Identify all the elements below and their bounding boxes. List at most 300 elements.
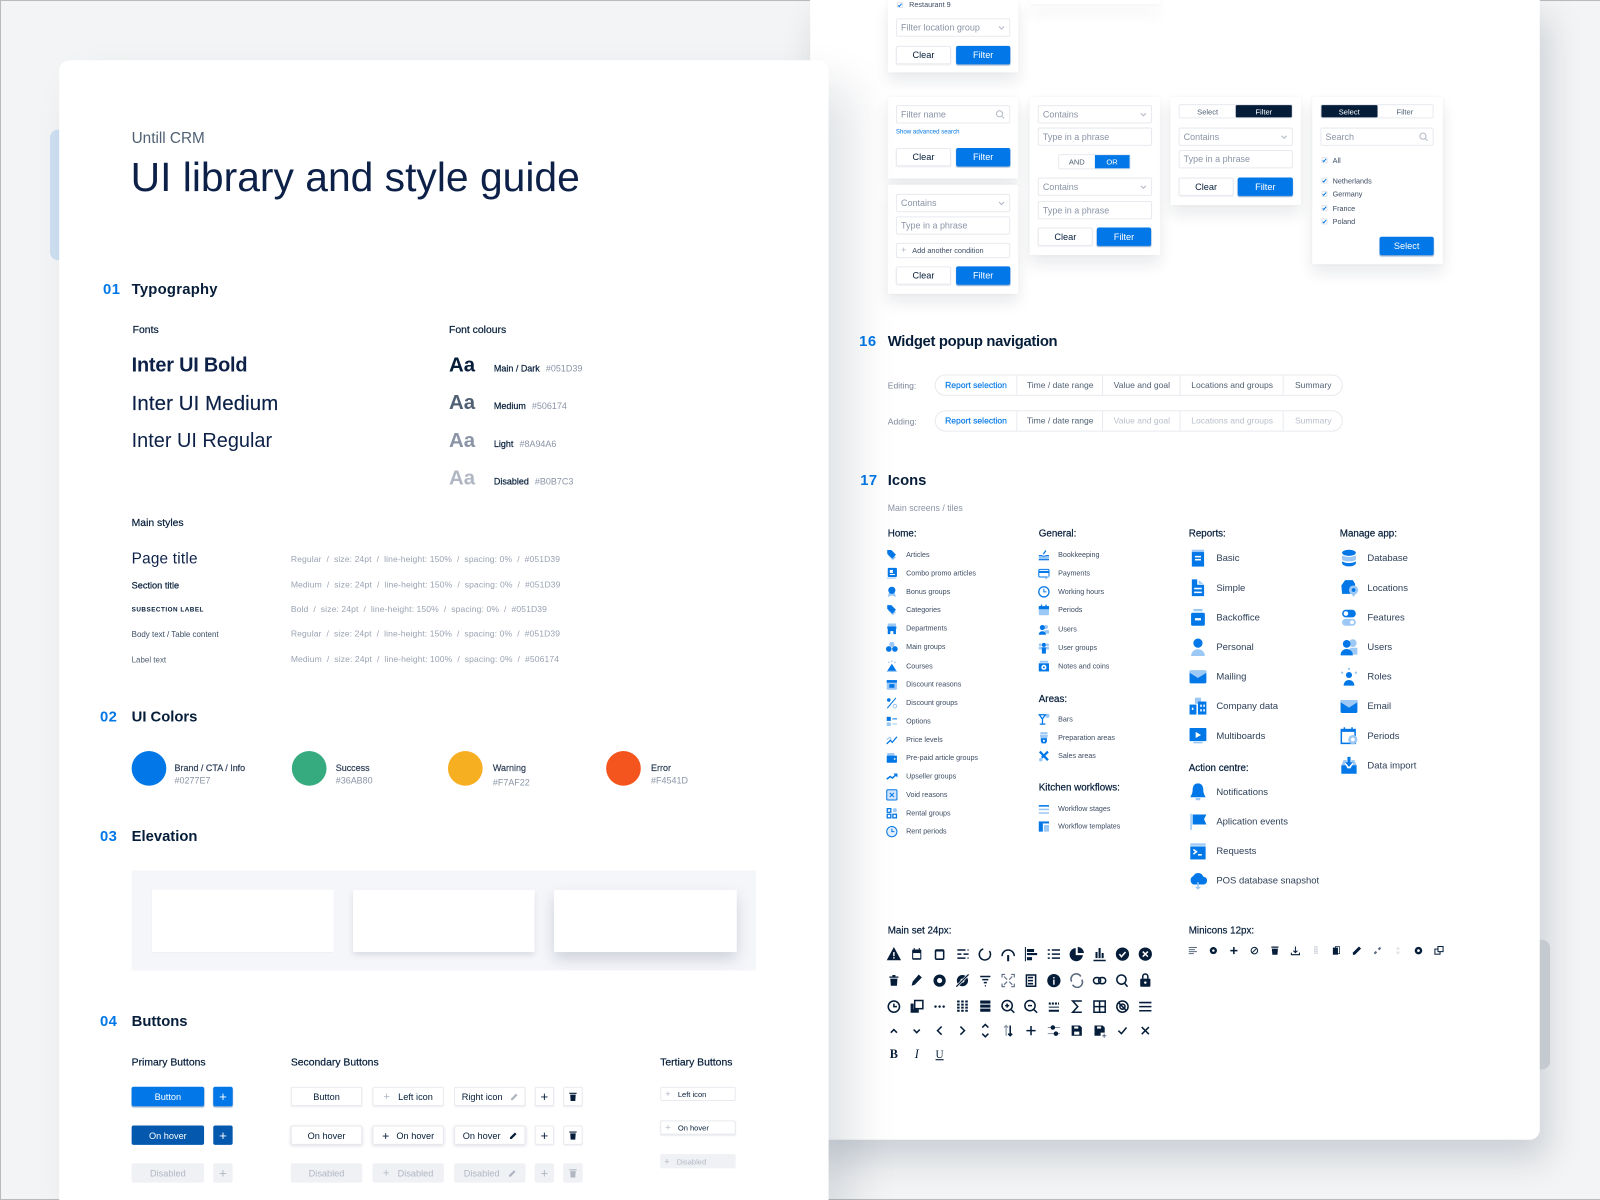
icon row: email: Email: [1367, 701, 1391, 711]
heading: 02 UI colors: [100, 709, 197, 727]
button: clear: [896, 266, 951, 285]
toggle: select filter: Select: [1197, 107, 1218, 116]
navigation bar: editing: Summary: [1295, 380, 1332, 390]
swatch hex: error: #F4541D: [651, 775, 688, 785]
icon row: main groups: [886, 642, 946, 652]
checkbox: france: [1321, 205, 1328, 211]
icon row: working hours: Working hours: [1058, 588, 1104, 595]
button: add another condition: +: [901, 245, 906, 255]
link: show advanced search: Show advanced search: [896, 129, 960, 136]
icon row: company data: [1190, 698, 1278, 715]
heading: 04 buttons: [100, 1014, 188, 1031]
icon row: preparation areas: Preparation areas: [1058, 734, 1115, 741]
select: contains second: Contains: [1043, 182, 1078, 192]
icon set: minicons 12px: [1184, 941, 1454, 961]
panel: buttons: [132, 1051, 756, 1189]
icon: zoom in: [1002, 1001, 1014, 1013]
icon row: discount reasons: Discount reasons: [906, 681, 961, 688]
button: clear: Clear: [1195, 182, 1217, 192]
minicon: sort faded: [1396, 947, 1400, 955]
title: UI library and style guide: [131, 155, 580, 200]
icon row: features: [1340, 608, 1405, 627]
icon row: combo promo articles: Combo promo articles: [906, 570, 976, 577]
heading: 17 icons: Icons: [888, 473, 926, 489]
icon: clock: [888, 1001, 899, 1012]
secondary left icon: disabled: Disabled: [398, 1168, 433, 1178]
toggle: select filter: Filter: [1255, 107, 1272, 116]
swatch: error: [606, 751, 641, 786]
checkbox: netherlands: [1321, 178, 1328, 184]
icon row: articles: [887, 550, 930, 560]
icon row: discount groups: [886, 698, 958, 708]
widget: contains with add condition: [888, 185, 1018, 294]
tertiary button: hover: On hover: [678, 1123, 709, 1132]
primary button: disabled: Disabled: [150, 1168, 186, 1178]
button: clear: [896, 148, 951, 166]
widget: country select: [1312, 97, 1443, 264]
style spec: page title: Regular / size: 24pt / line-height: 150% / spacing: 0% / #051D39: [291, 554, 560, 564]
select: contains: [1038, 105, 1152, 123]
select: contains: Contains: [1184, 132, 1219, 142]
font sample: bold: Inter UI Bold: [132, 354, 247, 377]
style sample: body text: Body text / Table content: [132, 630, 219, 639]
font colour: medium: [449, 391, 567, 415]
panel: elevation samples: [132, 870, 756, 970]
icon: loader: [979, 949, 990, 960]
icon row: users: [1340, 638, 1392, 656]
icon row: email: [1340, 697, 1391, 715]
secondary right icon: default: [454, 1087, 526, 1106]
button: clear: Clear: [1054, 232, 1076, 242]
minicon: plus: [1230, 947, 1237, 954]
eyebrow: Untill CRM: Untill CRM: [132, 130, 205, 147]
icon row: pre-paid article groups: Pre-paid article groups: [906, 755, 978, 762]
icon row: departments: Departments: [906, 625, 947, 632]
subtitle: main screens tiles: Main screens / tiles: [888, 503, 963, 513]
icon: save as: [1094, 1026, 1106, 1038]
icon row: workflow stages: Workflow stages: [1058, 806, 1110, 813]
input: type in a phrase: Type in a phrase: [1043, 132, 1109, 142]
style spec: body text: Regular / size: 24pt / line-height: 150% / spacing: 0% / #051D39: [291, 629, 560, 639]
icon row: void reasons: [886, 789, 948, 800]
secondary left icon: default: +: [383, 1090, 390, 1103]
secondary plus: hover: +: [541, 1128, 548, 1143]
subheading: font colours: Font colours: [449, 325, 506, 336]
icon row: bookkeeping: Bookkeeping: [1058, 552, 1099, 559]
icon row: preparation areas: [1040, 732, 1115, 744]
widget: partial filter list: [888, 0, 1018, 72]
toggle: select filter: Select: [1339, 107, 1360, 116]
navigation bar: editing: Value and goal: [1114, 380, 1170, 390]
tertiary button: default: +: [665, 1089, 671, 1099]
icon: bar chart: [1093, 948, 1106, 961]
icon row: payments: [1038, 568, 1090, 580]
button: filter: Filter: [1255, 182, 1276, 192]
icon row: articles: Articles: [906, 552, 930, 559]
icon row: options: Options: [906, 718, 931, 725]
icon row: departments: [887, 624, 947, 634]
icon: gauge: [1002, 950, 1014, 961]
subheading: manage app: Manage app:: [1340, 528, 1397, 540]
icon row: company data: Company data: [1216, 701, 1278, 711]
subheading: main set 24px: Main set 24px:: [888, 925, 951, 936]
panel: left sheet: [59, 60, 829, 1200]
icon row: POS database snapshot: POS database snapshot: [1216, 876, 1319, 886]
select: contains: Contains: [1043, 109, 1078, 119]
swatch: warning: [448, 751, 483, 786]
icon row: backoffice: Backoffice: [1216, 612, 1260, 622]
icon: menu: [1139, 1003, 1151, 1011]
toggle: and or: OR: [1106, 157, 1118, 166]
button: filter: Filter: [973, 152, 993, 162]
secondary right icon: default: Right icon: [462, 1091, 503, 1102]
minicon: ban: [1251, 947, 1258, 954]
icon row: notes and coins: Notes and coins: [1058, 663, 1109, 670]
icon row: working hours: [1038, 586, 1104, 598]
icon: news: [1026, 975, 1036, 986]
minicon: pencil: [1353, 947, 1361, 955]
icon row: database: Database: [1367, 553, 1408, 563]
icon row: personal: Personal: [1216, 642, 1254, 652]
select: filter location group: Filter location group: [901, 22, 980, 33]
icon row: user groups: [1038, 642, 1097, 654]
icon row: price levels: [886, 736, 943, 744]
primary button: hover: [132, 1126, 204, 1145]
checkbox: poland: [1321, 218, 1328, 224]
style sample: subsection label: SUBSECTION LABEL: [132, 606, 204, 614]
icon: check: [1118, 1028, 1127, 1034]
toggle: and or: [1058, 154, 1131, 169]
icon row: mailing: Mailing: [1216, 671, 1246, 682]
label: Restaurant 9: Restaurant 9: [909, 1, 951, 9]
icon row: periods: Periods: [1058, 607, 1082, 614]
icon: calendar: [912, 948, 921, 960]
icon row: POS database snapshot: [1189, 871, 1319, 890]
font sample: regular: Inter UI Regular: [132, 430, 272, 452]
icon row: pre-paid article groups: [886, 753, 978, 763]
style sample: page title: Page title: [132, 550, 198, 567]
card: elevation low: [152, 890, 334, 952]
icon: chevron down: [914, 1030, 920, 1033]
icon row: courses: [886, 660, 933, 672]
button: clear: Clear: [912, 50, 934, 60]
input: type in a phrase: Type in a phrase: [901, 220, 967, 231]
label: netherlands: Netherlands: [1333, 177, 1372, 185]
icon row: periods: [1038, 604, 1082, 616]
secondary button: disabled: Disabled: [309, 1168, 344, 1178]
secondary plus: disabled: +: [541, 1165, 548, 1181]
heading: 16 widget popup navigation: 16: [859, 334, 877, 350]
button: filter: [1097, 228, 1151, 246]
swatch label: success: Success: [336, 763, 370, 773]
widget: partial card: [1030, 0, 1160, 4]
background accent: grey tab behind right sheet: [1540, 940, 1550, 1069]
subheading: tertiary buttons: Tertiary Buttons: [660, 1058, 732, 1069]
font colour: main dark: Aa: [449, 354, 475, 377]
font colour: main dark: [449, 353, 582, 378]
tertiary button: disabled: Disabled: [677, 1157, 706, 1166]
subheading: fonts: Fonts: [133, 325, 159, 336]
navigation bar: adding: Time / date range: [1027, 415, 1094, 426]
icon row: features: Features: [1367, 612, 1405, 622]
style spec: label text: Medium / size: 24pt / line-height: 100% / spacing: 0% / #506174: [291, 654, 559, 664]
button: clear: Clear: [912, 152, 934, 162]
swatch label: warning: Warning: [493, 763, 526, 773]
icon row: users: Users: [1367, 642, 1392, 652]
icon: expand: [1002, 974, 1014, 987]
heading: 01 typography: Typography: [132, 282, 218, 298]
navigation bar: adding: Value and goal: [1114, 415, 1170, 426]
secondary button: default: Button: [313, 1091, 340, 1102]
primary plus: hover: [213, 1126, 233, 1145]
icon row: data import: Data import: [1367, 760, 1416, 770]
icon: indent list: [957, 950, 969, 958]
font colour: light: [449, 429, 556, 453]
button: filter: [1238, 178, 1293, 196]
swatch hex: brand: #0277E7: [174, 775, 210, 785]
primary button: hover: On hover: [149, 1130, 187, 1140]
icon row: sales areas: [1039, 750, 1096, 762]
icon row: locations: Locations: [1367, 583, 1408, 593]
checkbox: all: [1321, 157, 1328, 163]
style spec: section title: Medium / size: 24pt / line-height: 150% / spacing: 0% / #051D39: [291, 580, 560, 590]
icon row: users: [1038, 625, 1077, 635]
icon row: user groups: User groups: [1058, 644, 1097, 652]
widget: select filter toggle: [1170, 97, 1301, 205]
icon: chevron left: [938, 1027, 942, 1035]
heading: 17 icons: [860, 473, 926, 489]
secondary left icon: disabled: [372, 1163, 444, 1183]
tertiary button: hover: [660, 1120, 736, 1135]
icon: search: [1117, 975, 1128, 987]
select: filter location group: [896, 18, 1010, 37]
secondary button: hover: [291, 1126, 362, 1145]
swatch label: brand: Brand / CTA / Info: [174, 763, 245, 773]
swatch: success: [292, 751, 327, 786]
icon: chevron right: [960, 1027, 964, 1035]
minicon: trash: [1271, 947, 1278, 955]
heading: 02 UI colors: 02: [100, 709, 117, 726]
button: add another condition: [896, 243, 1010, 258]
icon: sliders: [1048, 1025, 1060, 1036]
icon: table: [1094, 1001, 1105, 1012]
icon: close circle: [1139, 947, 1152, 961]
icon: expand vertical: [982, 1024, 988, 1037]
input: search: [1320, 128, 1434, 146]
icon row: discount reasons: [886, 680, 962, 690]
minicon: duplicate: [1435, 947, 1443, 954]
font colour: main dark: Main / Dark #051D39: [494, 363, 582, 373]
heading: 03 elevation: [100, 829, 197, 847]
icon: align left: [1025, 947, 1037, 961]
secondary trash: hover: [563, 1126, 583, 1145]
subheading: areas: Areas:: [1039, 694, 1067, 705]
secondary right icon: hover: On hover: [463, 1130, 501, 1140]
button: clear: [1179, 178, 1234, 196]
icon row: database: [1340, 549, 1408, 567]
icon: bold: B: [890, 1047, 898, 1061]
subheading: main styles: Main styles: [132, 518, 184, 529]
navigation bar: adding: [935, 410, 1343, 432]
icon: link: [1093, 978, 1106, 984]
icon: more dots: [934, 1005, 945, 1008]
navigation bar: editing: Locations and groups: [1191, 380, 1273, 390]
font colour: medium: Aa: [449, 392, 475, 414]
input: type in a phrase: [896, 216, 1010, 235]
tertiary button: default: [660, 1087, 736, 1101]
icon: eye: [933, 974, 946, 987]
toggle: select filter: Filter: [1396, 107, 1413, 116]
icon: info: [1047, 974, 1061, 987]
tertiary button: default: Left icon: [678, 1089, 706, 1098]
secondary right icon: disabled: [454, 1163, 526, 1183]
navigation bar: editing: Time / date range: [1027, 380, 1094, 390]
button: clear: [896, 46, 951, 64]
input: filter name: Filter name: [901, 109, 946, 119]
icon: copy: [911, 1000, 923, 1013]
minicon: copy: [1333, 947, 1339, 955]
icon: calendar outline: [936, 949, 944, 959]
swatch: brand: [132, 751, 166, 786]
icon row: roles: Roles: [1367, 671, 1392, 682]
icon: underline: U: [936, 1049, 944, 1061]
input: search: Search: [1326, 132, 1354, 142]
icon: zoom out: [1025, 1001, 1037, 1013]
font colour: medium: Medium #506174: [494, 401, 567, 411]
button: add another condition: Add another condition: [912, 246, 984, 255]
card: elevation medium: [353, 890, 535, 952]
secondary left icon: default: [372, 1087, 444, 1106]
icon row: workflow templates: [1038, 821, 1120, 832]
primary button: default: Button: [155, 1091, 181, 1102]
icon row: bars: Bars: [1058, 716, 1073, 723]
secondary plus: default: +: [541, 1089, 548, 1104]
input: type in a phrase: [1038, 128, 1152, 146]
icon row: periods: Periods: [1367, 731, 1400, 741]
widget: and or filter: [1030, 97, 1160, 255]
select: contains: Contains: [901, 198, 936, 208]
widget: filter name: [888, 97, 1018, 179]
icon row: upseller groups: Upseller groups: [906, 773, 956, 780]
icon row: combo promo articles: [886, 568, 976, 579]
icon row: courses: Courses: [906, 663, 933, 670]
button: filter: [956, 266, 1010, 285]
icon row: mailing: [1190, 670, 1246, 684]
icon row: void reasons: Void reasons: [906, 791, 947, 798]
icon row: simple: Simple: [1216, 583, 1245, 593]
minicon: drag: [1315, 947, 1317, 955]
secondary right icon: disabled: Disabled: [464, 1168, 500, 1178]
button: filter: [956, 148, 1010, 166]
secondary plus: default: [535, 1087, 554, 1106]
label: france: France: [1333, 205, 1355, 213]
button: filter: Filter: [973, 50, 993, 60]
navigation bar: adding: Summary: [1295, 415, 1332, 426]
subheading: primary buttons: Primary Buttons: [132, 1058, 206, 1069]
icon row: backoffice: [1191, 608, 1260, 626]
style spec: subsection label: Bold / size: 24pt / line-height: 150% / spacing: 0% / #051D39: [291, 604, 547, 614]
secondary left icon: hover: +: [382, 1128, 389, 1142]
secondary trash: default: [563, 1087, 583, 1106]
icon: keyboard rows: [1049, 1004, 1059, 1012]
button: filter: [956, 46, 1010, 64]
secondary trash: disabled: [563, 1163, 583, 1183]
icon: trash: [889, 975, 898, 986]
icon: pencil: [912, 974, 922, 986]
label: editing: Editing:: [888, 381, 916, 391]
minicon: list: [1189, 948, 1197, 954]
subheading: kitchen workflows: Kitchen workflows:: [1039, 782, 1120, 794]
button: filter: Filter: [1114, 232, 1134, 242]
heading: 04 buttons: 04: [100, 1014, 117, 1030]
secondary left icon: hover: [372, 1126, 444, 1145]
label: poland: Poland: [1333, 218, 1355, 226]
icon row: application events: [1190, 814, 1288, 830]
font colour: disabled: Disabled #B0B7C3: [494, 477, 573, 487]
label: germany: Germany: [1333, 191, 1362, 199]
toggle: select filter: [1320, 104, 1434, 118]
icon row: notifications: [1190, 783, 1268, 800]
minicon: download: [1291, 947, 1299, 955]
select: contains second: [1038, 178, 1152, 196]
icon: pie chart: [1070, 947, 1084, 961]
input: type in a phrase: [1179, 150, 1293, 168]
input: type in a phrase: Type in a phrase: [1184, 154, 1250, 164]
checkbox: germany: [1321, 191, 1328, 197]
subheading: minicons 12px: Minicons 12px:: [1189, 925, 1254, 936]
heading: 17 icons: 17: [860, 473, 878, 489]
heading: 03 elevation: 03: [100, 829, 117, 845]
navigation bar: adding: Locations and groups: [1191, 415, 1273, 426]
minicon: settings: [1210, 947, 1217, 954]
icon set: main set 24px: [882, 941, 1162, 1067]
icon: sigma: [1073, 1001, 1082, 1012]
icon row: options: [886, 716, 931, 726]
font colour: disabled: Aa: [449, 467, 475, 490]
icon row: rental groups: Rental groups: [906, 810, 951, 817]
icon row: payments: Payments: [1058, 570, 1090, 577]
secondary left icon: default: Left icon: [398, 1091, 433, 1102]
icon: refresh: [1071, 974, 1082, 987]
icon: italic: I: [914, 1047, 920, 1061]
button: select: [1380, 237, 1434, 255]
primary plus: default: +: [219, 1089, 227, 1104]
icon row: rent periods: [886, 826, 947, 838]
subheading: secondary buttons: Secondary Buttons: [291, 1058, 379, 1069]
icon row: requests: Requests: [1216, 846, 1256, 856]
secondary plus: disabled: [535, 1163, 554, 1183]
icon row: rental groups: [886, 808, 951, 818]
select: contains: [896, 194, 1010, 212]
navigation bar: editing: Report selection: [945, 380, 1007, 390]
checkbox: Restaurant 9: [897, 2, 903, 8]
toggle: and or: AND: [1069, 157, 1085, 166]
icon row: multiboards: Multiboards: [1216, 731, 1265, 741]
tertiary button: disabled: +: [664, 1156, 670, 1166]
icon: plus: [1026, 1026, 1036, 1035]
panel: right sheet: [810, 0, 1540, 1140]
icon row: discount groups: Discount groups: [906, 699, 958, 707]
input: filter name: [896, 105, 1010, 123]
icon row: basic: Basic: [1216, 553, 1240, 563]
font colour: disabled: [449, 466, 573, 491]
icon row: personal: [1191, 638, 1254, 656]
navigation bar: adding: Report selection: [945, 415, 1007, 426]
button: clear: [1038, 228, 1093, 246]
icon: check circle: [1116, 947, 1129, 961]
icon row: sales areas: Sales areas: [1058, 753, 1096, 760]
heading: 04 buttons: Buttons: [132, 1014, 188, 1030]
